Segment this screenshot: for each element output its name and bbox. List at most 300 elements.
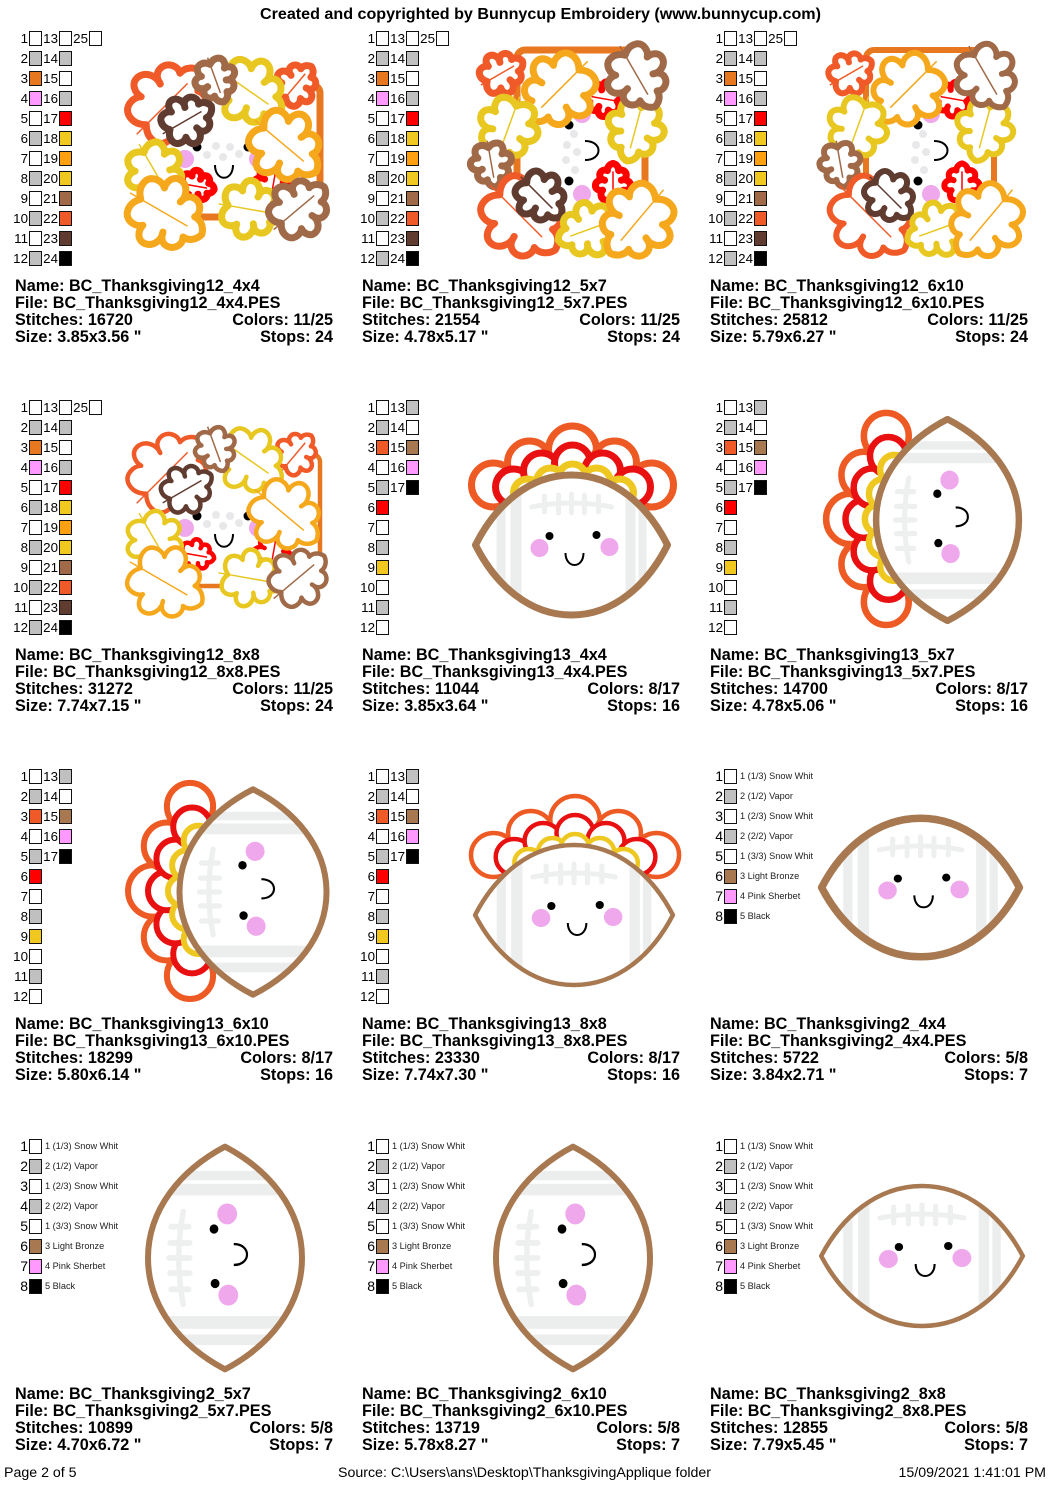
colour legend: 16 xyxy=(43,91,58,106)
colour legend: 24 xyxy=(738,251,754,266)
design details: Colors: 11/25 xyxy=(232,680,333,698)
colour legend: 21 xyxy=(390,191,405,206)
colour legend: 9 xyxy=(368,929,375,944)
colour legend: 3 xyxy=(20,1178,28,1194)
colour legend: 11 xyxy=(709,600,723,615)
colour legend: 4 xyxy=(368,91,376,106)
colour legend: 3 xyxy=(715,808,723,824)
design details: Colors: 11/25 xyxy=(232,311,333,329)
design details: Stops: 24 xyxy=(955,328,1028,346)
design details: Name: BC_Thanksgiving13_4x4 xyxy=(362,646,607,664)
design details xyxy=(710,1015,1028,1084)
design details: File: BC_Thanksgiving2_5x7.PES xyxy=(15,1402,272,1420)
panel: BC_Thanksgiving12_8x8 xyxy=(13,400,343,715)
colour legend: 9 xyxy=(21,929,28,944)
design details: Stops: 24 xyxy=(260,697,333,715)
design details: Stitches: 31272 xyxy=(15,680,133,698)
design: football sideways xyxy=(148,1147,302,1369)
colour legend: 12 xyxy=(708,620,723,635)
panel: BC_Thanksgiving12_4x4 xyxy=(13,31,343,346)
colour legend: 13 xyxy=(43,400,58,415)
colour legend: 16 xyxy=(43,829,58,844)
colour legend: 11 xyxy=(709,231,723,246)
colour legend: 8 xyxy=(21,540,28,555)
colour legend: 12 xyxy=(13,989,28,1004)
colour legend: 21 xyxy=(43,191,58,206)
design: turkey football sideways xyxy=(826,413,1019,625)
panel: BC_Thanksgiving12_5x7 xyxy=(360,31,692,346)
design details: Stitches: 10899 xyxy=(15,1419,133,1437)
colour legend xyxy=(13,31,102,266)
colour legend: 23 xyxy=(738,231,753,246)
colour legend: 18 xyxy=(738,131,753,146)
colour legend: 17 xyxy=(390,849,405,864)
design details xyxy=(362,1385,680,1454)
design details: File: BC_Thanksgiving12_6x10.PES xyxy=(710,294,985,312)
colour legend: 2 xyxy=(715,1158,723,1174)
design details: Name: BC_Thanksgiving12_8x8 xyxy=(15,646,260,664)
colour legend: 2 (1/2) Vapor xyxy=(740,791,793,801)
design: football xyxy=(821,1186,1023,1326)
colour legend: 1 xyxy=(21,400,28,415)
design details: File: BC_Thanksgiving13_8x8.PES xyxy=(362,1032,628,1050)
design details: File: BC_Thanksgiving2_8x8.PES xyxy=(710,1402,967,1420)
design: football sideways xyxy=(496,1147,650,1369)
colour legend xyxy=(708,31,796,266)
design details: File: BC_Thanksgiving12_4x4.PES xyxy=(15,294,281,312)
colour legend: 1 (3/3) Snow Whit xyxy=(45,1221,118,1231)
colour legend: 23 xyxy=(390,231,405,246)
colour legend: 6 xyxy=(21,131,28,146)
colour legend: 2 (1/2) Vapor xyxy=(740,1161,793,1171)
design: leaf wreath xyxy=(109,412,343,635)
colour legend: 6 xyxy=(716,131,723,146)
colour legend: 15 xyxy=(390,809,405,824)
colour legend: 20 xyxy=(390,171,405,186)
colour legend: 8 xyxy=(716,171,723,186)
design details: Stops: 24 xyxy=(607,328,680,346)
design details: Name: BC_Thanksgiving13_8x8 xyxy=(362,1015,607,1033)
colour legend: 8 xyxy=(716,540,723,555)
colour legend: 4 Pink Sherbet xyxy=(45,1261,106,1271)
colour legend: 3 xyxy=(21,71,28,86)
colour legend: 7 xyxy=(368,151,375,166)
design details: Colors: 8/17 xyxy=(240,1049,333,1067)
colour legend xyxy=(360,769,418,1004)
colour legend: 22 xyxy=(43,211,58,226)
colour legend: 2 xyxy=(21,420,28,435)
colour legend: 15 xyxy=(43,71,58,86)
design details: Stops: 16 xyxy=(260,1066,333,1084)
colour legend: 1 (3/3) Snow Whit xyxy=(740,851,813,861)
colour legend: 13 xyxy=(43,769,58,784)
colour legend: 4 xyxy=(20,1198,28,1214)
colour legend: 8 xyxy=(715,908,723,924)
design details: Name: BC_Thanksgiving2_8x8 xyxy=(710,1385,946,1403)
footer: page number: Page 2 of 5 xyxy=(4,1465,77,1481)
colour legend: 4 xyxy=(21,460,29,475)
design details xyxy=(15,277,333,346)
design details: Name: BC_Thanksgiving13_5x7 xyxy=(710,646,955,664)
colour legend: 1 xyxy=(716,400,723,415)
colour legend: 3 xyxy=(368,809,375,824)
colour legend: 6 xyxy=(21,500,28,515)
colour legend: 17 xyxy=(43,849,58,864)
colour legend: 1 (1/3) Snow Whit xyxy=(392,1141,465,1151)
colour legend: 8 xyxy=(21,909,28,924)
design details xyxy=(15,1385,333,1454)
colour legend: 11 xyxy=(361,969,375,984)
colour legend: 5 Black xyxy=(740,1281,771,1291)
colour legend: 8 xyxy=(20,1278,28,1294)
colour legend: 25 xyxy=(73,31,88,46)
colour legend: 21 xyxy=(738,191,753,206)
colour legend: 2 xyxy=(715,788,723,804)
colour legend: 1 (2/3) Snow Whit xyxy=(392,1181,465,1191)
design details: Name: BC_Thanksgiving12_6x10 xyxy=(710,277,964,295)
colour legend: 13 xyxy=(390,769,405,784)
design: turkey football sideways xyxy=(128,783,326,999)
colour legend: 2 (1/2) Vapor xyxy=(392,1161,445,1171)
colour legend: 7 xyxy=(21,889,28,904)
colour legend: 15 xyxy=(738,440,753,455)
colour legend: 12 xyxy=(360,251,375,266)
panel: BC_Thanksgiving13_8x8 xyxy=(360,769,680,1084)
colour legend: 7 xyxy=(368,520,375,535)
design details xyxy=(362,646,680,715)
panel: BC_Thanksgiving2_5x7 xyxy=(15,1138,333,1454)
colour legend: 5 xyxy=(21,480,28,495)
colour legend: 5 Black xyxy=(45,1281,76,1291)
colour legend: 16 xyxy=(738,91,753,106)
colour legend: 19 xyxy=(43,151,58,166)
colour legend: 5 xyxy=(368,111,375,126)
colour legend: 18 xyxy=(390,131,405,146)
colour legend: 19 xyxy=(390,151,405,166)
colour legend: 24 xyxy=(43,620,59,635)
design details xyxy=(15,646,333,715)
panel: BC_Thanksgiving13_4x4 xyxy=(360,400,680,715)
design details: Stitches: 21554 xyxy=(362,311,480,329)
colour legend: 6 xyxy=(367,1238,375,1254)
colour legend: 14 xyxy=(738,51,754,66)
design details: Stitches: 16720 xyxy=(15,311,133,329)
design details: Stitches: 12855 xyxy=(710,1419,828,1437)
design details: Size: 3.85x3.64 " xyxy=(362,697,488,715)
colour legend: 4 xyxy=(368,460,376,475)
colour legend: 13 xyxy=(738,31,753,46)
design details: Colors: 11/25 xyxy=(579,311,680,329)
design details xyxy=(362,277,680,346)
colour legend: 13 xyxy=(43,31,58,46)
colour legend: 3 xyxy=(716,71,723,86)
design details: Stitches: 5722 xyxy=(710,1049,819,1067)
colour legend: 16 xyxy=(390,460,405,475)
colour legend: 16 xyxy=(390,91,405,106)
colour legend: 17 xyxy=(738,480,753,495)
colour legend: 1 xyxy=(715,768,723,784)
colour legend: 24 xyxy=(390,251,406,266)
colour legend: 2 (2/2) Vapor xyxy=(392,1201,445,1211)
colour legend: 11 xyxy=(361,231,375,246)
colour legend: 8 xyxy=(21,171,28,186)
design details: Size: 7.79x5.45 " xyxy=(710,1436,836,1454)
colour legend: 3 Light Bronze xyxy=(392,1241,451,1251)
colour legend: 5 xyxy=(21,849,28,864)
colour legend: 10 xyxy=(360,211,375,226)
design: football xyxy=(822,818,1019,957)
colour legend: 22 xyxy=(738,211,753,226)
colour legend: 11 xyxy=(14,969,28,984)
colour legend: 1 xyxy=(368,400,375,415)
design details: File: BC_Thanksgiving13_5x7.PES xyxy=(710,663,976,681)
design details: Colors: 8/17 xyxy=(935,680,1028,698)
colour legend xyxy=(367,1138,465,1294)
design details: Colors: 5/8 xyxy=(249,1419,333,1437)
colour legend: 16 xyxy=(738,460,753,475)
design details: Size: 7.74x7.30 " xyxy=(362,1066,488,1084)
colour legend: 12 xyxy=(13,620,28,635)
colour legend: 4 Pink Sherbet xyxy=(740,891,801,901)
colour legend: 3 Light Bronze xyxy=(740,871,799,881)
colour legend: 1 (1/3) Snow Whit xyxy=(740,771,813,781)
colour legend: 5 Black xyxy=(740,911,771,921)
design details: Size: 4.78x5.06 " xyxy=(710,697,836,715)
colour legend: 2 (2/2) Vapor xyxy=(740,1201,793,1211)
colour legend xyxy=(13,400,102,635)
colour legend: 12 xyxy=(13,251,28,266)
design details: Stops: 16 xyxy=(607,697,680,715)
colour legend: 1 (3/3) Snow Whit xyxy=(740,1221,813,1231)
design details: Name: BC_Thanksgiving2_6x10 xyxy=(362,1385,607,1403)
design details: Size: 3.85x3.56 " xyxy=(15,328,141,346)
colour legend: 12 xyxy=(708,251,723,266)
design details: Colors: 5/8 xyxy=(596,1419,680,1437)
design details: Size: 7.74x7.15 " xyxy=(15,697,141,715)
design details xyxy=(710,646,1028,715)
colour legend xyxy=(360,31,448,266)
colour legend xyxy=(360,400,418,635)
colour legend: 1 xyxy=(367,1138,375,1154)
colour legend: 1 (2/3) Snow Whit xyxy=(740,811,813,821)
colour legend: 20 xyxy=(43,171,58,186)
colour legend: 1 xyxy=(715,1138,723,1154)
colour legend: 11 xyxy=(361,600,375,615)
colour legend: 3 xyxy=(368,440,375,455)
design: leaf wreath tall xyxy=(461,31,692,279)
colour legend: 1 xyxy=(368,31,375,46)
design details xyxy=(710,277,1028,346)
design details: Size: 5.78x8.27 " xyxy=(362,1436,488,1454)
design details: Stitches: 18299 xyxy=(15,1049,133,1067)
design details: Stops: 16 xyxy=(955,697,1028,715)
colour legend: 1 xyxy=(21,769,28,784)
colour legend: 4 xyxy=(716,91,724,106)
colour legend: 1 (1/3) Snow Whit xyxy=(45,1141,118,1151)
colour legend: 3 xyxy=(715,1178,723,1194)
design details: Colors: 5/8 xyxy=(944,1419,1028,1437)
colour legend: 7 xyxy=(368,889,375,904)
colour legend: 17 xyxy=(43,480,58,495)
colour legend: 5 Black xyxy=(392,1281,423,1291)
colour legend: 10 xyxy=(708,580,723,595)
colour legend: 2 (1/2) Vapor xyxy=(45,1161,98,1171)
colour legend: 7 xyxy=(715,1258,723,1274)
panel: BC_Thanksgiving2_4x4 xyxy=(710,768,1028,1084)
colour legend: 4 xyxy=(715,1198,723,1214)
colour legend: 7 xyxy=(367,1258,375,1274)
colour legend: 4 xyxy=(367,1198,375,1214)
colour legend: 4 Pink Sherbet xyxy=(392,1261,453,1271)
colour legend: 11 xyxy=(14,231,28,246)
colour legend: 4 Pink Sherbet xyxy=(740,1261,801,1271)
colour legend: 14 xyxy=(738,420,754,435)
design details: Size: 4.70x6.72 " xyxy=(15,1436,141,1454)
colour legend xyxy=(20,1138,118,1294)
colour legend: 5 xyxy=(20,1218,28,1234)
colour legend: 5 xyxy=(368,480,375,495)
design details: Stitches: 14700 xyxy=(710,680,828,698)
colour legend: 20 xyxy=(43,540,58,555)
colour legend: 7 xyxy=(715,888,723,904)
design details: Colors: 8/17 xyxy=(587,680,680,698)
design details: Size: 5.80x6.14 " xyxy=(15,1066,141,1084)
colour legend: 17 xyxy=(390,480,405,495)
colour legend: 9 xyxy=(716,560,723,575)
colour legend: 16 xyxy=(390,829,405,844)
colour legend: 3 Light Bronze xyxy=(45,1241,104,1251)
design details: File: BC_Thanksgiving13_6x10.PES xyxy=(15,1032,290,1050)
colour legend: 5 xyxy=(21,111,28,126)
colour legend: 23 xyxy=(43,231,58,246)
colour legend: 15 xyxy=(43,440,58,455)
design details: Stops: 7 xyxy=(964,1066,1028,1084)
colour legend: 14 xyxy=(390,789,406,804)
colour legend: 10 xyxy=(13,211,28,226)
colour legend: 1 (3/3) Snow Whit xyxy=(392,1221,465,1231)
design details: Stitches: 11044 xyxy=(362,680,479,698)
colour legend: 8 xyxy=(368,171,375,186)
colour legend: 9 xyxy=(368,560,375,575)
design details: File: BC_Thanksgiving2_4x4.PES xyxy=(710,1032,967,1050)
design details: Stops: 24 xyxy=(260,328,333,346)
colour legend: 9 xyxy=(21,191,28,206)
colour legend: 18 xyxy=(43,131,58,146)
colour legend: 8 xyxy=(368,909,375,924)
design details: Stitches: 23330 xyxy=(362,1049,480,1067)
design details: Colors: 8/17 xyxy=(587,1049,680,1067)
design details: Size: 5.79x6.27 " xyxy=(710,328,836,346)
colour legend: 6 xyxy=(715,1238,723,1254)
colour legend: 14 xyxy=(43,51,59,66)
colour legend: 24 xyxy=(43,251,59,266)
colour legend: 3 Light Bronze xyxy=(740,1241,799,1251)
colour legend: 6 xyxy=(715,868,723,884)
colour legend: 7 xyxy=(716,151,723,166)
colour legend: 2 xyxy=(368,420,375,435)
colour legend: 14 xyxy=(43,789,59,804)
design details: Size: 4.78x5.17 " xyxy=(362,328,488,346)
colour legend: 10 xyxy=(13,949,28,964)
design details: File: BC_Thanksgiving13_4x4.PES xyxy=(362,663,628,681)
colour legend: 9 xyxy=(21,560,28,575)
design details: Stitches: 25812 xyxy=(710,311,828,329)
design details: File: BC_Thanksgiving2_6x10.PES xyxy=(362,1402,628,1420)
colour legend: 4 xyxy=(21,91,29,106)
colour legend: 2 xyxy=(21,789,28,804)
design details: Colors: 5/8 xyxy=(944,1049,1028,1067)
colour legend: 25 xyxy=(768,31,783,46)
colour legend: 16 xyxy=(43,460,58,475)
colour legend: 2 xyxy=(368,51,375,66)
panel: BC_Thanksgiving13_5x7 xyxy=(708,400,1028,715)
colour legend: 5 xyxy=(715,848,723,864)
colour legend: 19 xyxy=(43,520,58,535)
colour legend: 12 xyxy=(360,989,375,1004)
colour legend: 3 xyxy=(21,440,28,455)
colour legend: 10 xyxy=(708,211,723,226)
design details xyxy=(15,1015,333,1084)
colour legend: 1 xyxy=(20,1138,28,1154)
colour legend: 8 xyxy=(367,1278,375,1294)
colour legend xyxy=(715,1138,813,1294)
colour legend: 5 xyxy=(367,1218,375,1234)
design: turkey football xyxy=(471,796,679,985)
colour legend: 5 xyxy=(715,1218,723,1234)
design details: Stops: 7 xyxy=(616,1436,680,1454)
design details: Stops: 7 xyxy=(964,1436,1028,1454)
colour legend: 1 (2/3) Snow Whit xyxy=(740,1181,813,1191)
colour legend: 21 xyxy=(43,560,58,575)
colour legend: 15 xyxy=(43,809,58,824)
colour legend: 2 (2/2) Vapor xyxy=(45,1201,98,1211)
design details xyxy=(710,1385,1028,1454)
design details: Stitches: 13719 xyxy=(362,1419,480,1437)
colour legend: 7 xyxy=(716,520,723,535)
colour legend: 10 xyxy=(360,949,375,964)
colour legend: 1 xyxy=(368,769,375,784)
colour legend: 22 xyxy=(43,580,58,595)
colour legend: 4 xyxy=(715,828,723,844)
colour legend: 8 xyxy=(368,540,375,555)
colour legend: 2 xyxy=(368,789,375,804)
colour legend: 20 xyxy=(738,171,753,186)
colour legend: 25 xyxy=(73,400,88,415)
design details: Name: BC_Thanksgiving12_4x4 xyxy=(15,277,260,295)
colour legend: 5 xyxy=(716,111,723,126)
colour legend: 2 xyxy=(716,420,723,435)
colour legend: 15 xyxy=(390,440,405,455)
panel: BC_Thanksgiving2_8x8 xyxy=(710,1138,1028,1454)
colour legend: 2 (2/2) Vapor xyxy=(740,831,793,841)
footer: date: 15/09/2021 1:41:01 PM xyxy=(898,1465,1046,1481)
panel: BC_Thanksgiving13_6x10 xyxy=(13,769,333,1084)
footer: source path: Source: C:\Users\ans\Desktop\ThanksgivingApplique folder xyxy=(338,1465,711,1481)
design details: File: BC_Thanksgiving12_8x8.PES xyxy=(15,663,281,681)
colour legend: 11 xyxy=(14,600,28,615)
colour legend: 15 xyxy=(390,71,405,86)
design: leaf wreath tall xyxy=(810,31,1041,279)
design details: File: BC_Thanksgiving12_5x7.PES xyxy=(362,294,628,312)
design: turkey football xyxy=(472,426,674,615)
design details: Stops: 16 xyxy=(607,1066,680,1084)
colour legend: 17 xyxy=(738,111,753,126)
colour legend: 13 xyxy=(738,400,753,415)
colour legend: 1 (1/3) Snow Whit xyxy=(740,1141,813,1151)
colour legend: 6 xyxy=(368,869,375,884)
colour legend: 6 xyxy=(20,1238,28,1254)
design details: Name: BC_Thanksgiving12_5x7 xyxy=(362,277,607,295)
